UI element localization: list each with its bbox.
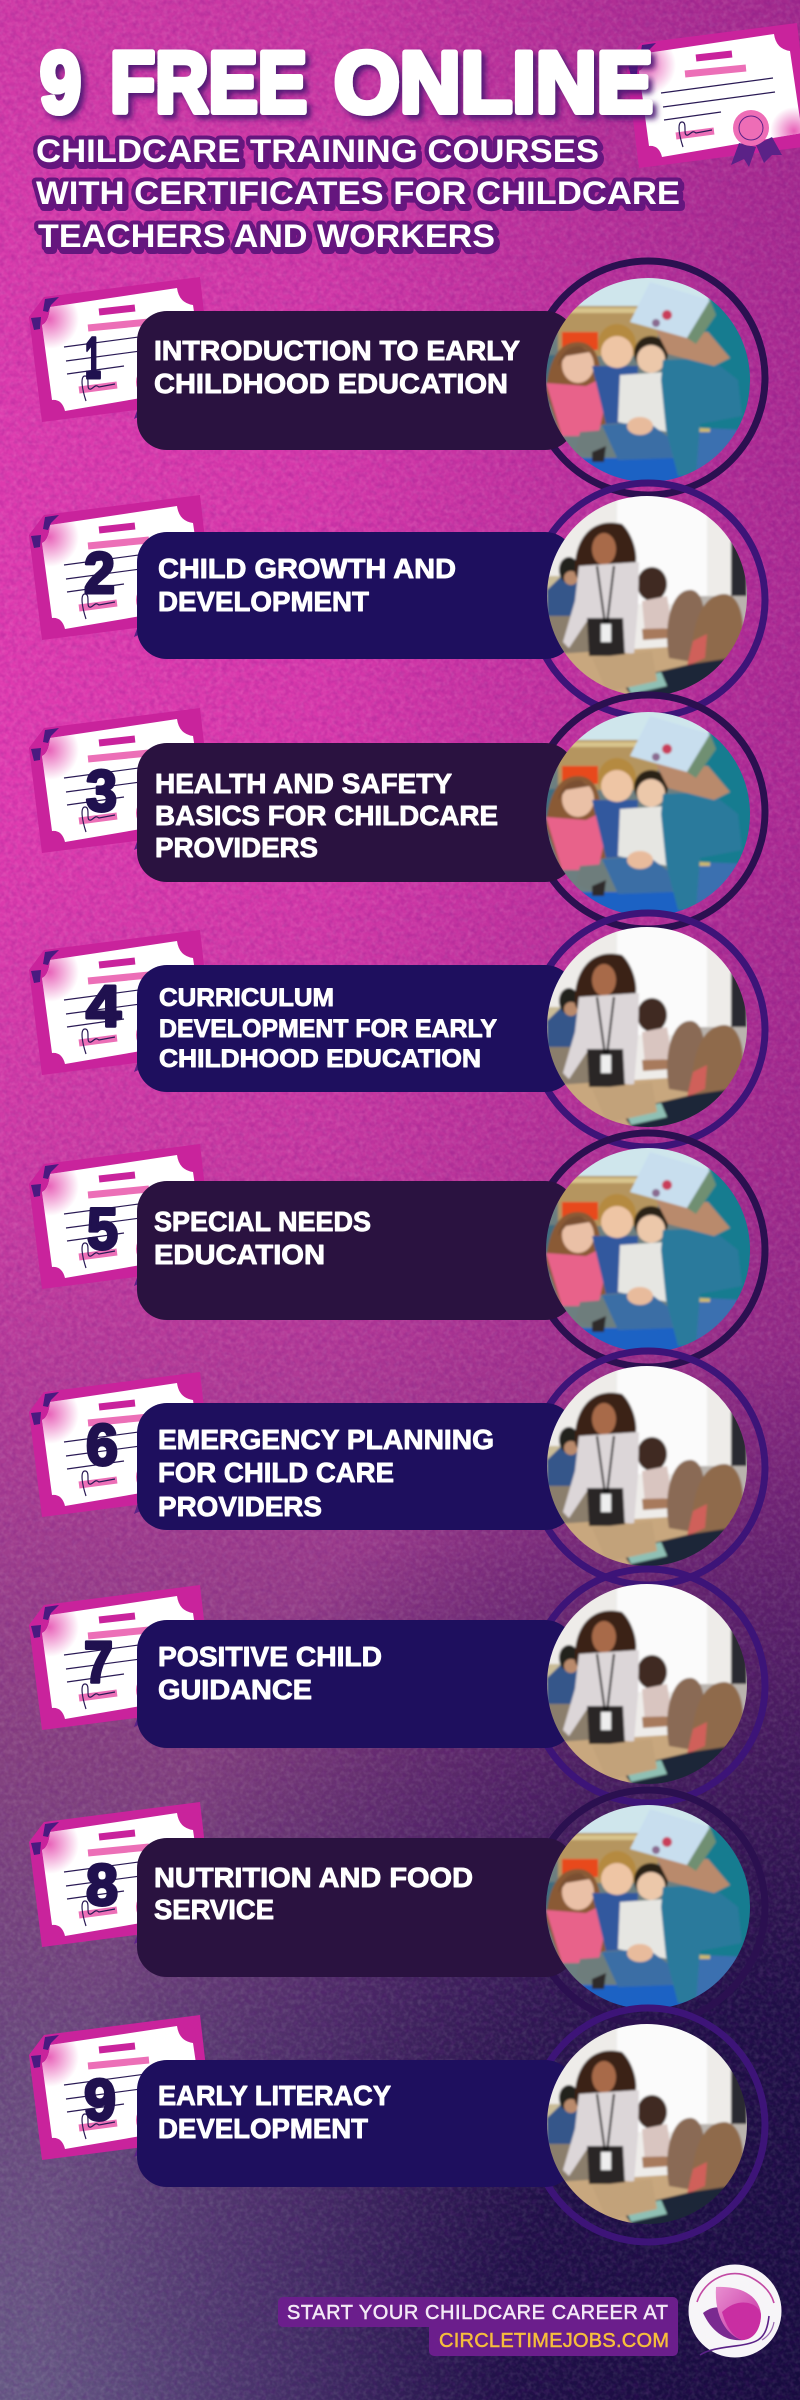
certificate icon — [19, 1372, 221, 1517]
label pill — [137, 2060, 575, 2187]
course name: CHILDHOOD EDUCATION — [154, 368, 508, 399]
photo: teacher in classroom — [545, 494, 749, 698]
footer line 1: START YOUR CHILDCARE CAREER AT — [287, 2302, 668, 2324]
number: 8 — [86, 1853, 118, 1918]
logo — [688, 2264, 782, 2358]
label pill — [137, 965, 575, 1092]
course name: FOR CHILD CARE — [158, 1457, 394, 1488]
photo ring — [531, 695, 765, 929]
course name: HEALTH AND SAFETY — [155, 768, 452, 799]
course name — [154, 1206, 371, 1270]
label pill — [137, 311, 575, 450]
course name: SERVICE — [154, 1894, 274, 1925]
course name — [154, 335, 520, 399]
course 8 — [19, 1790, 765, 2024]
course 2 — [19, 483, 765, 717]
course name: INTRODUCTION TO EARLY — [154, 335, 520, 366]
footer line 2: website: CIRCLETIMEJOBS.COM — [439, 2330, 669, 2352]
course name: DEVELOPMENT — [158, 586, 369, 617]
course name: CHILDHOOD EDUCATION — [159, 1045, 481, 1073]
photo ring — [531, 483, 765, 717]
photo: teacher in classroom — [545, 2022, 749, 2226]
course 1 — [19, 261, 765, 495]
certificate icon — [19, 1585, 221, 1730]
certificate icon — [19, 1802, 221, 1947]
course name: CHILD GROWTH AND — [158, 553, 456, 584]
course name — [154, 1862, 473, 1925]
photo: children listening to story — [544, 276, 758, 488]
certificate icon — [19, 495, 221, 640]
label pill — [137, 1620, 575, 1748]
course name: DEVELOPMENT — [158, 2113, 368, 2144]
photo ring — [531, 2008, 765, 2242]
photo: children listening to story — [544, 710, 758, 922]
photo ring — [531, 913, 765, 1147]
icon: header certificate — [616, 23, 800, 168]
course 5 — [19, 1133, 765, 1367]
photo ring — [531, 261, 765, 495]
course name — [159, 984, 497, 1073]
course name: EDUCATION — [154, 1239, 325, 1270]
number: 3 — [86, 759, 117, 824]
certificate icon — [19, 1144, 221, 1289]
photo: children listening to story — [544, 1146, 758, 1358]
label pill — [137, 1403, 575, 1530]
footer call to action — [278, 2297, 678, 2356]
subtitle: WITH CERTIFICATES FOR CHILDCARE — [36, 175, 680, 211]
photo: teacher in classroom — [545, 1582, 749, 1786]
certificate icon — [19, 2015, 221, 2160]
label pill — [137, 1181, 575, 1320]
label pill — [137, 743, 575, 882]
title: FREE — [110, 35, 307, 131]
course name — [155, 768, 498, 863]
photo: children listening to story — [544, 1803, 758, 2015]
course name: CURRICULUM — [159, 984, 334, 1012]
footer chips — [278, 2297, 678, 2356]
course name: POSITIVE CHILD — [158, 1641, 382, 1672]
course name — [158, 553, 456, 617]
course name: NUTRITION AND FOOD — [154, 1862, 473, 1893]
course name: PROVIDERS — [155, 832, 318, 863]
course name: BASICS FOR CHILDCARE — [155, 800, 498, 831]
subtitle — [36, 133, 680, 254]
course name: GUIDANCE — [158, 1674, 312, 1705]
title: 9 — [40, 35, 81, 131]
subtitle: TEACHERS AND WORKERS — [38, 218, 495, 254]
subtitle: CHILDCARE TRAINING COURSES — [36, 133, 599, 169]
number: 4 — [86, 974, 121, 1039]
label pill — [137, 1838, 575, 1977]
course name: EMERGENCY PLANNING — [158, 1424, 494, 1455]
photo ring — [531, 1351, 765, 1585]
photo ring — [531, 1569, 765, 1803]
course 9 — [19, 2008, 765, 2242]
course name: DEVELOPMENT FOR EARLY — [159, 1015, 497, 1043]
course 3 — [19, 695, 765, 929]
title — [40, 35, 653, 131]
label pill — [137, 532, 575, 659]
course name: EARLY LITERACY — [158, 2080, 391, 2111]
certificate icon — [19, 930, 221, 1075]
course 4 — [19, 913, 765, 1147]
course 6 — [19, 1351, 765, 1585]
course 7 — [19, 1569, 765, 1803]
course name — [158, 1424, 494, 1522]
number: 7 — [84, 1630, 113, 1695]
certificate icon — [19, 708, 221, 853]
certificate icon — [19, 277, 221, 422]
number: 6 — [86, 1413, 118, 1478]
title: ONLINE — [334, 35, 653, 131]
course 1: 1 — [85, 326, 101, 391]
course name: PROVIDERS — [158, 1491, 322, 1522]
number: 9 — [84, 2068, 116, 2133]
photo ring — [531, 1133, 765, 1367]
course name: SPECIAL NEEDS — [154, 1206, 371, 1237]
course name — [158, 2080, 391, 2144]
photo: teacher in classroom — [545, 1364, 749, 1568]
number: 5 — [87, 1197, 118, 1262]
photo: teacher in classroom — [545, 925, 749, 1129]
course name — [158, 1641, 382, 1705]
number: 2 — [84, 541, 115, 606]
photo ring — [531, 1790, 765, 2024]
